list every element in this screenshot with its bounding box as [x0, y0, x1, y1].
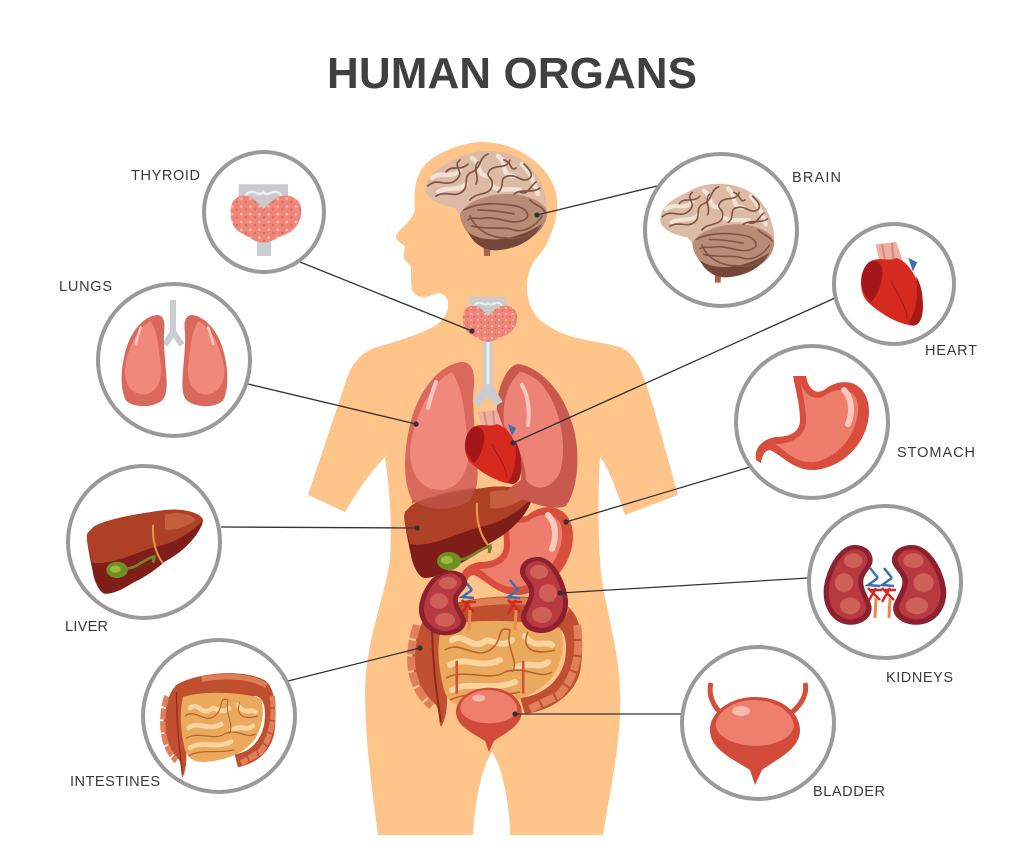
leader line: brain [534, 186, 657, 218]
panel: lungs: LUNGS [59, 279, 112, 295]
organ: brain in body [426, 151, 547, 256]
organ: bladder in body [456, 661, 523, 752]
organ: left lung shadow over liver [412, 488, 476, 509]
panel: kidneys: KIDNEYS [886, 670, 953, 686]
panel: bladder [682, 647, 885, 800]
organ: gallbladder in body [437, 546, 491, 570]
panel: heart: HEART [925, 343, 977, 359]
organ: left lung in body [405, 362, 478, 509]
leader line: kidneys [557, 578, 808, 596]
panel: thyroid: THYROID [131, 168, 200, 184]
leader line: liver [221, 525, 420, 531]
panel: thyroid [131, 152, 324, 272]
organ: intestines in body [411, 596, 582, 727]
panel: liver [65, 466, 220, 635]
panel: intestines [70, 640, 295, 792]
panel: liver: LIVER [65, 619, 108, 635]
leader line: thyroid [300, 262, 475, 334]
organ: stomach in body [460, 501, 573, 595]
organ: thyroid in body [463, 297, 517, 342]
organ: heart in body [465, 410, 521, 484]
leader line: intestines [288, 645, 423, 681]
organ: liver in body [404, 487, 532, 578]
leader line: lungs [248, 384, 419, 427]
panel: bladder: BLADDER [813, 784, 885, 800]
panel: stomach [736, 346, 975, 498]
panel: heart [834, 224, 977, 359]
leader line: heart [510, 298, 835, 446]
panel: intestines: INTESTINES [70, 774, 160, 790]
organ: right lung in body [497, 364, 577, 508]
panel: kidneys [809, 506, 961, 686]
organ: trachea in body [476, 338, 499, 404]
panel: brain [645, 154, 841, 306]
panel: stomach: STOMACH [897, 445, 975, 461]
panel: brain: BRAIN [792, 170, 841, 186]
organ: kidneys in body [419, 557, 568, 635]
panel: lungs [59, 279, 250, 436]
leader line: bladder [512, 711, 681, 717]
organ: kidney vessels in body [462, 580, 522, 630]
leader line: stomach [563, 467, 750, 525]
title: HUMAN ORGANS [327, 49, 697, 98]
body silhouette [308, 142, 678, 835]
